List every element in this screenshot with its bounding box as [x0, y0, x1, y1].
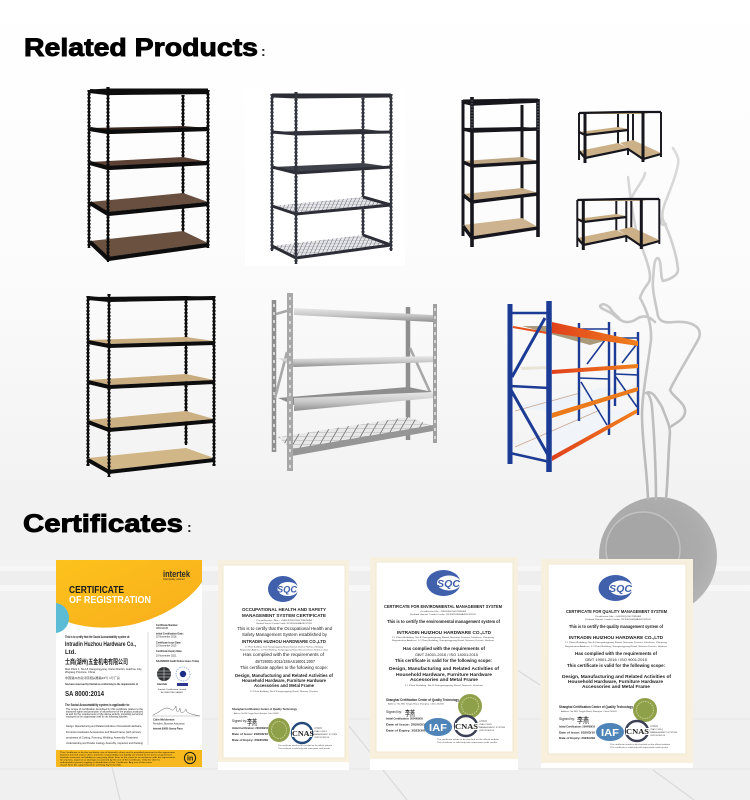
CNAS mark: CERTIFICATION — [314, 736, 330, 739]
certificate body text: improved rights and protection of all personnel of the product produced — [66, 710, 144, 714]
yellow footer bar: in — [187, 756, 193, 762]
header text: intertek — [163, 569, 191, 579]
CNAS mark: 认可标志 — [650, 724, 658, 728]
certificate details column: 000012345 — [156, 627, 169, 630]
certificate text: Has complied with the requirements of — [575, 651, 658, 656]
certificate details column: 20 November 2018 — [156, 636, 177, 638]
CNAS mark: CNAS — [292, 730, 314, 738]
certificate text: This certificate is valid for the following scope: — [567, 663, 666, 668]
SQC logo — [268, 576, 298, 602]
CNAS mark: MANAGEMENT SYSTEM — [314, 733, 337, 736]
certificate text — [232, 607, 333, 750]
certificate body text: This is to certify that the Social Accountability system of: — [65, 635, 130, 639]
certificate text: Accessories and Metal Frame — [410, 677, 478, 682]
certificate text: Address: No.388, Tongjia Road, Shanghai, China 200431 — [561, 710, 618, 713]
certificate text: Registration Address: 1# Plant Building, Xiangxingyang Road, Nanxun District, Huzhou — [565, 645, 668, 648]
green seal — [458, 694, 482, 718]
certificate text: Registration Address: 1# Plant Building, Xiangxingyang Road, Nanxun District, Huzhou — [392, 639, 495, 642]
certificate text: Household Hardware, Furniture Hardware — [396, 672, 492, 677]
yellow footer bar: must first be approved in writing by Intertek. — [60, 764, 123, 766]
certificate text: This certificate applies to the following scope: — [240, 665, 328, 670]
header text: CERTIFICATE — [69, 584, 124, 596]
certificate details column: 19 November 2021 — [156, 654, 177, 658]
yellow footer bar: authorized to permit copying or distribution of this Certificate. Any use of the name — [60, 761, 153, 764]
certificate text: This is to certify the quality management system of — [569, 624, 663, 629]
CNAS mark: 认可标志 — [479, 719, 487, 723]
header text — [69, 569, 191, 606]
signature block — [152, 706, 200, 730]
SQC logo: SQC — [609, 584, 633, 595]
certificate text: The certificate needs to be checked on the official website — [437, 738, 500, 741]
certificate text: 45/T28001-2011/18SAS18001:2007 — [255, 659, 316, 664]
certificate text: This certificate is valid only with supervision audit results — [278, 747, 330, 750]
blue accent circle — [56, 603, 69, 633]
certificate text: Initial Certification: 2004/09/10 — [232, 726, 268, 730]
certificate details column: Certificate Issue Date: — [156, 642, 181, 644]
certificate body text: SA 8000:2014 — [65, 689, 105, 698]
certificate text: Unified Social Credit Code: 91330500MA28C8T0X — [585, 618, 652, 621]
header text: OF REGISTRATION — [69, 594, 151, 606]
certificate text: This certificate is valid only with supervision audit results — [610, 746, 668, 749]
certificate text: GB/T 24001-2016 / ISO 14001:2015 — [415, 652, 479, 657]
certificate body text: Understanding and Powder coating), Assembly, Inspection and Packing) — [66, 741, 143, 745]
certificate text: Signed by: — [386, 710, 402, 714]
certificate text: Has complied with the requirements of — [403, 646, 486, 651]
certificate text: This is to certify that the Occupational Health and — [237, 626, 333, 631]
yellow footer bar: between Intertek and its client. Intertek's responsibility and liability are limited to the terms of agreement — [60, 754, 173, 756]
yellow footer bar: for any loss, expense or damage occasioned by the use of this Certificate. Only the client is — [60, 758, 160, 762]
CNAS mark: CNAS C188-S — [314, 730, 328, 733]
certificate body text: 中国湖州市南浔区相兴杨路16号 1号厂房 — [65, 676, 120, 680]
title: Certificates: Certificates — [23, 510, 183, 538]
certificate text: CERTIFICATE FOR ENVIRONMENTAL MANAGEMENT SYSTEM — [384, 604, 502, 609]
accreditation logos — [157, 667, 190, 694]
certificate: SQC quality management — [541, 559, 693, 768]
certificate text: Address: No.388, Tongjia Road, Shanghai, China 200431 — [234, 712, 280, 715]
certificate body text: The Social Accountability system is applicable to: — [65, 703, 130, 707]
certificate details column: 19 November 2019 — [156, 644, 177, 648]
product: L-shaped corner shelf, lower view — [577, 198, 659, 250]
product: L-shaped corner shelf, top view — [579, 111, 661, 163]
IAF mark: IAF — [601, 728, 619, 739]
certificate text: Date of Expiry: 2023/3/09 — [559, 736, 595, 740]
certificate text: Date of Issue: 2020/3/10 — [232, 732, 269, 736]
certificate text: INTRADIN HUZHOU HARDWARE CO.,LTD — [242, 639, 326, 644]
CNAS mark: MANAGEMENT SYSTEM — [479, 726, 505, 729]
certificate text — [384, 604, 502, 744]
title: Related Products: Related Products — [24, 34, 258, 62]
certificate text: This is to certify the environmental management system of — [387, 619, 500, 624]
certificate text: Initial Certification: 2004/09/10 — [559, 724, 595, 728]
CNAS mark — [455, 716, 505, 736]
certificate text: Certificate No.: 04618Q20079R0M — [595, 615, 641, 618]
certificate text: MANAGEMENT SYSTEM CERTIFICATE — [242, 613, 326, 618]
CNAS mark: CNAS — [455, 722, 478, 731]
certificate body text: at and for the requirements of the above activity, including personnel — [66, 713, 144, 716]
certificate text: CERTIFICATE FOR QUALITY MANAGEMENT SYSTEM — [566, 609, 667, 614]
IAF mark — [424, 718, 452, 736]
certificate body text: Design, Manufacturing and Related Activities of Household Hardware, — [66, 724, 142, 728]
certificate text: This certificate is valid for the following scope: — [395, 658, 493, 663]
CNAS mark: CERTIFICATION — [479, 729, 495, 732]
certificate text: INTRADIN HUIZHOU HARDWARE CO.,LTD — [397, 630, 491, 635]
certificate body text: The scope of certification described by this certificate relates to the — [66, 708, 144, 711]
certificate text: Registration Address: 1# Plant Building, Xiangxingyang Road, Nanxun District, Huzhou, China — [240, 648, 329, 652]
certificate text: Signed by: — [232, 719, 247, 723]
CNAS mark: CNAS C188-E — [479, 723, 493, 726]
certificate text: Signed by: — [559, 717, 575, 721]
certificate details column: Certificate Expiry Date: — [156, 650, 183, 653]
yellow footer bar: This Certificate is for the exclusive use of Intertek's client and is provided pursuant to the agreement — [60, 751, 176, 754]
certificate text: This certificate is valid only with supervision audit results — [437, 741, 497, 744]
certificate text: Shanghai Certification Center of Quality Technology — [559, 705, 633, 709]
certificate text: Certificate No.: 04618S20079R0M — [256, 619, 312, 622]
certificate body text: employed by the organization itself for the following activities: — [66, 716, 128, 718]
certificate text: 李燕 — [405, 708, 415, 718]
certificate body text: Zhejiang Province, China — [65, 670, 96, 674]
certificate text: Accessories and Metal Frame — [254, 683, 314, 688]
CNAS mark: CNAS — [626, 727, 649, 736]
certificate text: Safety Management System established by — [242, 632, 328, 637]
yellow footer bar: Intertek assumes no liability to any party other than to the client in accordance with the agreement — [60, 756, 176, 759]
certificate text: The certificate needs to be checked on the official website — [278, 744, 333, 747]
certificate text — [559, 609, 671, 749]
decorative vase with branches — [599, 148, 717, 615]
SQC logo: SQC — [277, 584, 297, 594]
title: Related Products: : — [261, 43, 266, 59]
green seal — [633, 698, 657, 722]
CNAS mark: CNAS C188-Q — [650, 728, 664, 731]
certificate text: 李燕 — [247, 717, 257, 727]
certificate body text: processes of Cutting, Forming, Welding, Assembly Treatment — [66, 736, 138, 740]
certificate details column: Certificate Number: — [156, 624, 178, 627]
certificate text: Shanghai Certification Center of Quality Technology — [232, 707, 297, 711]
signature block: President, Business Assurance — [153, 722, 185, 726]
product: dark grey shelf with wire decks — [245, 88, 405, 266]
certificate text: Date of Expiry: 2023/3/09 — [232, 738, 268, 742]
certificate text: Unified Social Credit Code: 91330500MA28C8T0X — [256, 622, 313, 625]
certificate text: Household Hardware, Furniture Hardware — [568, 679, 663, 684]
product: blue and orange warehouse rack — [510, 301, 638, 472]
product: black shelf with tan boards — [463, 97, 538, 247]
SQC logo — [426, 570, 461, 596]
certificate text: Unified Social Credit Code: 91330500MA28C8T0X — [410, 613, 477, 616]
certificate body text: 士商(湖州)五金机电有限公司 — [65, 657, 128, 666]
certificate body text: Intradin Huzhou Hardware Co., — [65, 642, 136, 648]
certificate details column: Initial Certification Date: — [156, 632, 184, 636]
certificate text: Household Hardware, Furniture Hardware — [242, 678, 326, 683]
certificate text: INTRADIN HUIZHOU HARDWARE CO.,LTD — [569, 635, 663, 640]
green seal — [268, 718, 290, 742]
CNAS mark — [292, 723, 337, 743]
product: black rivet shelf with beige boards — [88, 294, 214, 477]
certificate text: OCCUPATIONAL HEALTH AND SAFETY — [242, 607, 326, 612]
certificate text: Design, Manufacturing and Related Activities of — [235, 673, 333, 678]
header text: Total Quality. Assured. — [163, 578, 185, 581]
certificate details column — [148, 624, 200, 745]
certificate text: Has complied with the requirements of — [243, 652, 325, 657]
certificate text: 1# Plant Building, No.8 Xiangxingyang Road, Nanxun District, Huzhou, Zhejiang — [565, 641, 668, 644]
accreditation logos: Intertek — [157, 682, 168, 686]
product: black rivet shelf with brown boards — [89, 87, 208, 262]
CNAS mark — [626, 721, 677, 741]
signature block: Intertek 80000 Sentry Place — [153, 728, 183, 730]
yellow header curve — [56, 560, 202, 628]
IAF mark: IAF — [429, 723, 447, 734]
certificate text: Design, Manufacturing and Related Activities of — [389, 666, 499, 671]
CNAS mark: MANAGEMENT SYSTEM — [650, 731, 677, 734]
title: Certificates: : — [187, 519, 192, 535]
certificate body text: Furniture Hardware Accessories and Metal Frame (with primary — [66, 730, 142, 734]
certificate body text — [65, 635, 144, 745]
SQC logo: SQC — [437, 579, 461, 590]
certificate text: GB/T 19001-2016 / ISO 9001:2015 — [585, 657, 648, 662]
certificate body text: Ltd. — [65, 650, 76, 656]
certificate text: Address: No.388, Tongjia Road, Shanghai, China 200431 — [388, 702, 445, 706]
SQC logo — [598, 575, 633, 601]
accreditation logos: Intertek Certification Limited — [158, 688, 187, 691]
certificate text: 李燕 — [577, 715, 589, 725]
certificate text: Date of Issue: 2020/3/10 — [559, 730, 595, 734]
certificate: SQC environmental management — [370, 557, 518, 770]
CNAS mark: 认可标志 — [314, 726, 322, 730]
certificate text: 1# Plant Building, No.8 Xiangxingyang Road, Nanxun District, Huzhou, Zhejiang — [392, 636, 495, 639]
IAF mark — [596, 723, 624, 741]
certificate text: 1# Plant Building, No.8 Xiangxingyang Road, Nanxun, Huzhou — [250, 690, 319, 693]
signature block: Calin Moldovean — [153, 718, 175, 722]
product: galvanized steel rack — [274, 293, 435, 471]
certificate: Intertek SA 8000 — [56, 560, 202, 767]
certificate body text: has been assessed by Intertek as conforming to the requirements of — [65, 682, 138, 686]
yellow footer bar — [56, 750, 202, 767]
CNAS mark: CERTIFICATION — [650, 734, 666, 737]
certificate text: The certificate needs to be checked on the official website — [610, 743, 671, 746]
certificate text: Design, Manufacturing and Related Activities of — [562, 674, 671, 679]
accreditation logos: ACCREDITED SA8000 — [161, 691, 184, 694]
certificate text: Certificate No.: 04618E20079R0M — [420, 610, 466, 613]
certificate details column: SAAS80000 Audit Notice Hours Today — [156, 660, 200, 663]
certificate text: Shanghai Certification Center of Quality Technology — [386, 698, 459, 702]
certificate: SQC occupational health and safety — [218, 560, 349, 770]
certificate text: 1# Plant Building, No.8 Xiangxingyang Road, Nanxun, Huzhou — [405, 684, 484, 687]
certificate body text: Max Plant 1, No.16 Xiangxingyang, Nanxi District, Huizhou City, — [65, 667, 142, 671]
certificate text: Date of Expiry: 2023/3/09 — [386, 728, 427, 732]
certificate text: Date of Issue: 2020/3/10 — [386, 722, 427, 726]
certificate text: Accessories and Metal Frame — [582, 684, 650, 689]
certificate text: Initial Certification: 2004/09/10 — [386, 716, 423, 720]
certificate text: 1# Plant Building, No.8 Xiangxingyang Road, Nanxun District, Huzhou, Zhejiang — [245, 646, 324, 648]
